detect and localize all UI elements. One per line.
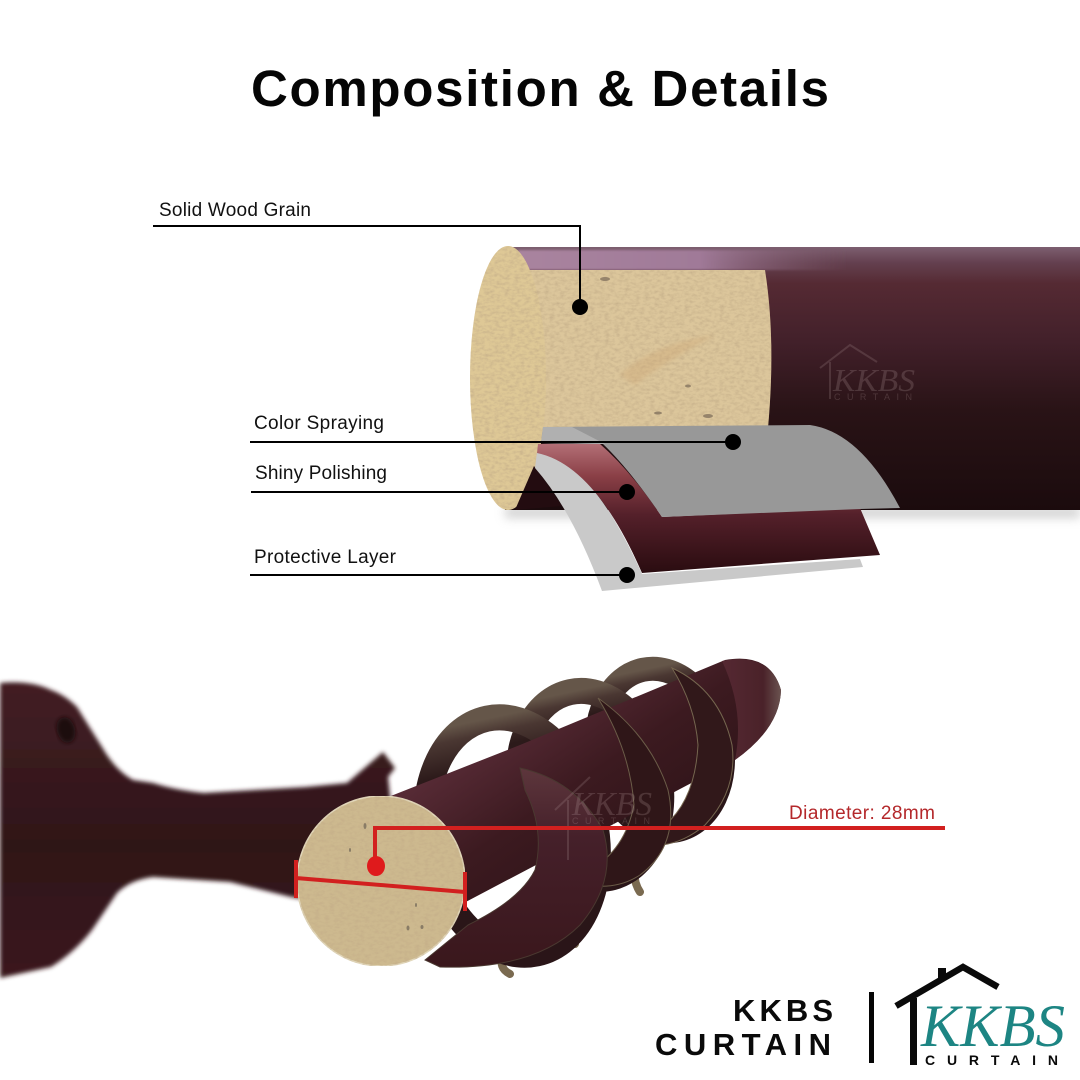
logo divider: [869, 992, 874, 1063]
disc specks: [349, 823, 424, 930]
brand wordmark: [655, 993, 833, 1062]
brand wordmark: CURTAIN: [655, 1027, 831, 1062]
wood grain streak: [620, 335, 715, 385]
brand logo: KKBS: [920, 993, 1065, 1059]
bracket and rings illustration: [0, 657, 781, 978]
front ring back half: [405, 701, 619, 971]
bracket screw hole: [54, 715, 78, 745]
rod end face: [470, 246, 546, 510]
brand logo: CURTAIN: [925, 1052, 1058, 1068]
back ring: [582, 657, 738, 843]
purple sheen: [518, 250, 848, 270]
middle ring: [502, 678, 678, 892]
shiny polishing sheet: [537, 444, 880, 573]
callout: shiny polishing: Shiny Polishing: [255, 463, 387, 484]
watermark: [555, 777, 652, 860]
exposed wood band: [512, 270, 771, 428]
protective layer sheet: [535, 452, 863, 591]
maroon rod body: [505, 247, 1080, 510]
front of first ring: [425, 768, 607, 967]
callout: protective layer: [250, 547, 635, 583]
rod shadow: [505, 507, 1080, 518]
top rod illustration: [470, 246, 1080, 591]
wood specks: [600, 277, 713, 418]
callout: protective layer: Protective Layer: [254, 547, 397, 568]
callout: solid wood grain: [153, 200, 588, 315]
front of back ring: [662, 668, 733, 845]
title: Composition & Details: [251, 60, 829, 117]
callout: shiny polishing: [251, 463, 635, 500]
diameter callout: [296, 803, 945, 911]
wall bracket: [0, 682, 400, 978]
colour spraying sheet: [541, 425, 900, 517]
rod knob end: [722, 659, 781, 760]
hooks: [502, 862, 640, 974]
watermark: CURTAIN: [572, 816, 650, 826]
curtain rod: [335, 659, 781, 960]
brand logo: [896, 967, 1065, 1068]
brand wordmark: KKBS: [733, 993, 833, 1028]
watermark: CURTAIN: [834, 392, 912, 402]
watermark: KKBS: [832, 362, 915, 398]
front of middle ring: [590, 698, 671, 886]
dark gap under the end face: [515, 466, 562, 510]
watermark: [820, 345, 915, 402]
callout: solid wood grain: Solid Wood Grain: [159, 200, 311, 221]
diameter callout: Diameter: 28mm: [789, 803, 935, 824]
wood end disc: [297, 796, 465, 966]
callout: color spraying: [250, 413, 741, 450]
watermark: KKBS: [571, 786, 652, 823]
callout: color spraying: Color Spraying: [254, 413, 384, 434]
